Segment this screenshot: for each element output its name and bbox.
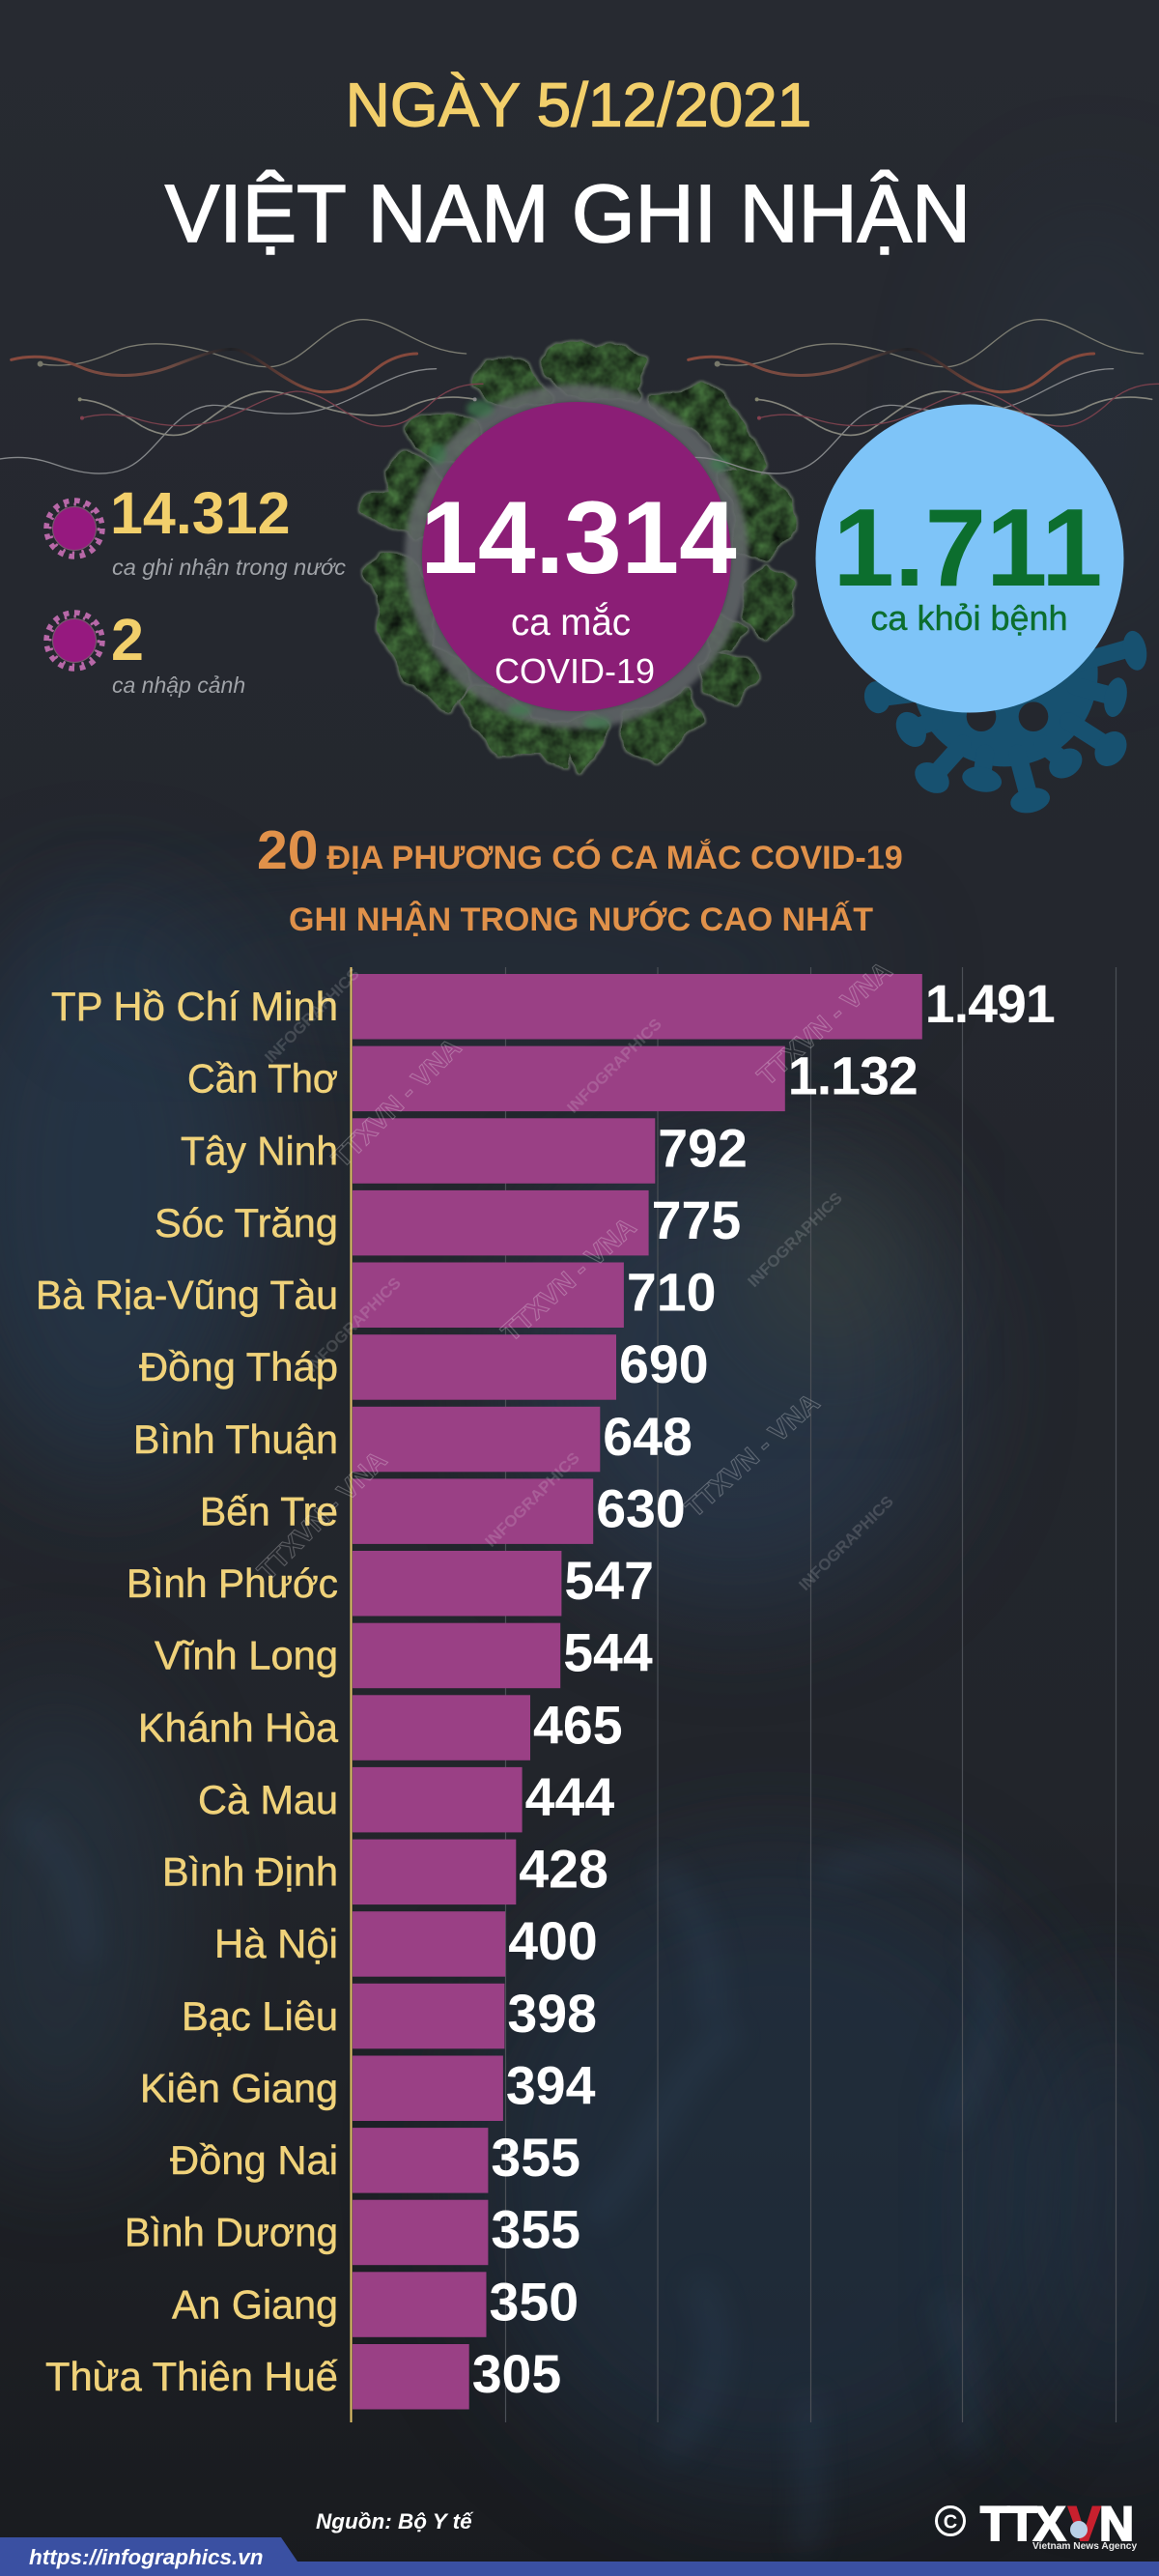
wavy lines: left: [0, 320, 483, 473]
label: ca khỏi bệnh: ca khỏi bệnh: [870, 598, 1068, 638]
row: Bến Tre: 630: [596, 1478, 686, 1538]
row: Thừa Thiên Huế: Thừa Thiên Huế: [45, 2354, 338, 2399]
main heading: VIỆT NAM GHI NHẬN: [165, 168, 971, 259]
logo: TTXVN: [937, 2497, 1137, 2552]
row: Bình Thuận: 648: [603, 1407, 693, 1467]
row: Bình Dương: 355: [491, 2200, 580, 2260]
icon: small virus: [46, 501, 102, 557]
row: Bình Thuận: [133, 1407, 693, 1472]
row: Đồng Tháp: 690: [619, 1334, 709, 1394]
watermarks: TTXVN - VNA: [751, 956, 897, 1091]
wordmark: TTXVN: [980, 2497, 1134, 2551]
watermarks: INFOGRAPHICS: [302, 1274, 405, 1376]
copyright mark: C: [944, 2512, 957, 2533]
source note: Nguồn: Bộ Y tế: [316, 2509, 474, 2533]
row: Khánh Hòa: Khánh Hòa: [138, 1704, 339, 1750]
heading line 2: GHI NHẬN TRONG NƯỚC CAO NHẤT: [289, 902, 873, 938]
row: Sóc Trăng: [155, 1190, 741, 1255]
row: Bạc Liêu: [182, 1984, 597, 2048]
footer bar: [0, 2537, 1159, 2576]
row: Cần Thơ: [187, 1046, 919, 1111]
icon: small virus: [46, 613, 102, 669]
label: ca mắc: ca mắc: [511, 602, 631, 644]
row: Bà Rịa-Vũng Tàu: 710: [627, 1262, 717, 1322]
row: Bình Định: [162, 1840, 608, 1904]
domestic caption: ca ghi nhận trong nước: [112, 555, 346, 580]
website url: https://infographics.vn: [29, 2545, 264, 2569]
row: Bình Thuận: Bình Thuận: [133, 1417, 338, 1462]
icon: green coronavirus: [365, 345, 792, 770]
row: Bạc Liêu: Bạc Liêu: [182, 1993, 338, 2039]
imported caption: ca nhập cảnh: [112, 673, 245, 698]
row: Bạc Liêu: 398: [507, 1984, 597, 2044]
date heading: NGÀY 5/12/2021: [346, 70, 811, 139]
row: An Giang: 350: [489, 2272, 579, 2332]
row: Tây Ninh: 792: [658, 1118, 748, 1178]
watermarks: [251, 956, 897, 1594]
watermarks: INFOGRAPHICS: [261, 964, 363, 1067]
row: Cần Thơ: 1.132: [788, 1046, 919, 1106]
row: Kiên Giang: Kiên Giang: [140, 2066, 338, 2110]
row: Vĩnh Long: Vĩnh Long: [155, 1633, 338, 1678]
watermarks: TTXVN - VNA: [679, 1388, 825, 1523]
row: Cần Thơ: Cần Thơ: [187, 1056, 338, 1102]
chart heading: [257, 819, 903, 938]
row: Đồng Tháp: Đồng Tháp: [139, 1344, 338, 1389]
row: Thừa Thiên Huế: 305: [472, 2344, 561, 2404]
row: Bến Tre: [200, 1478, 686, 1544]
bar chart: [36, 967, 1117, 2422]
domestic number: 14.312: [110, 480, 291, 546]
row: Đồng Tháp: [139, 1334, 709, 1400]
stat: imported cases: [46, 607, 245, 698]
row: Vĩnh Long: [155, 1623, 653, 1688]
row: Bà Rịa-Vũng Tàu: [36, 1262, 717, 1328]
callout: recovered: [815, 404, 1124, 713]
row: TP Hồ Chí Minh: TP Hồ Chí Minh: [51, 984, 338, 1029]
heading line 1: 20 ĐỊA PHƯƠNG CÓ CA MẮC COVID-19: [257, 819, 903, 881]
watermarks: TTXVN - VNA: [325, 1032, 466, 1173]
row: TP Hồ Chí Minh: 1.491: [925, 974, 1056, 1034]
row: Bình Phước: 547: [564, 1551, 654, 1611]
imported number: 2: [111, 607, 144, 673]
row: Bình Phước: Bình Phước: [127, 1560, 338, 1606]
row: Vĩnh Long: 544: [563, 1623, 653, 1683]
watermarks: INFOGRAPHICS: [795, 1492, 897, 1594]
row: Bà Rịa-Vũng Tàu: Bà Rịa-Vũng Tàu: [36, 1272, 338, 1318]
row: Sóc Trăng: Sóc Trăng: [155, 1200, 338, 1245]
watermarks: INFOGRAPHICS: [744, 1188, 846, 1291]
row: Sóc Trăng: 775: [652, 1190, 741, 1250]
row: Cà Mau: [198, 1767, 614, 1832]
row: Bình Định: 428: [519, 1840, 608, 1900]
row: Bình Dương: Bình Dương: [125, 2210, 338, 2255]
row: Bình Phước: [127, 1551, 654, 1616]
row: Cà Mau: 444: [525, 1767, 614, 1827]
row: Tây Ninh: [181, 1118, 748, 1184]
row: Bình Dương: [125, 2200, 580, 2265]
row: TP Hồ Chí Minh: [51, 974, 1056, 1040]
row: Bến Tre: Bến Tre: [200, 1488, 338, 1533]
wavy lines: right: [677, 320, 1159, 473]
title: [165, 70, 971, 259]
row: Hà Nội: 400: [508, 1911, 598, 1971]
row: Thừa Thiên Huế: [45, 2344, 561, 2410]
watermarks: TTXVN - VNA: [495, 1212, 641, 1347]
row: Cà Mau: Cà Mau: [198, 1777, 338, 1822]
row: Kiên Giang: 394: [506, 2056, 596, 2116]
row: An Giang: An Giang: [172, 2281, 338, 2327]
row: Hà Nội: Hà Nội: [214, 1921, 338, 1966]
tagline: Vietnam News Agency: [1032, 2541, 1137, 2552]
total cases number: 14.314: [420, 479, 737, 595]
callout: total cases: [420, 402, 737, 711]
watermarks: INFOGRAPHICS: [563, 1015, 665, 1117]
stat: domestic cases: [46, 480, 346, 580]
recovered number: 1.711: [833, 487, 1103, 610]
row: Hà Nội: [214, 1911, 598, 1977]
row: An Giang: [172, 2272, 579, 2337]
row: Đồng Nai: 355: [491, 2128, 580, 2188]
watermarks: TTXVN - VNA: [251, 1445, 392, 1586]
row: Khánh Hòa: 465: [533, 1695, 623, 1755]
watermarks: INFOGRAPHICS: [481, 1448, 583, 1551]
blue circle: [815, 404, 1124, 713]
copyright mark: [937, 2506, 964, 2535]
purple circle: [422, 402, 731, 711]
row: Kiên Giang: [140, 2056, 596, 2121]
row: Tây Ninh: Tây Ninh: [181, 1128, 338, 1173]
row: Khánh Hòa: [138, 1695, 623, 1760]
row: Bình Định: Bình Định: [162, 1849, 338, 1895]
icon: blue virus: [862, 580, 1149, 816]
row: Đồng Nai: [170, 2128, 580, 2193]
row: Đồng Nai: Đồng Nai: [170, 2137, 338, 2183]
label: COVID-19: COVID-19: [495, 651, 655, 691]
